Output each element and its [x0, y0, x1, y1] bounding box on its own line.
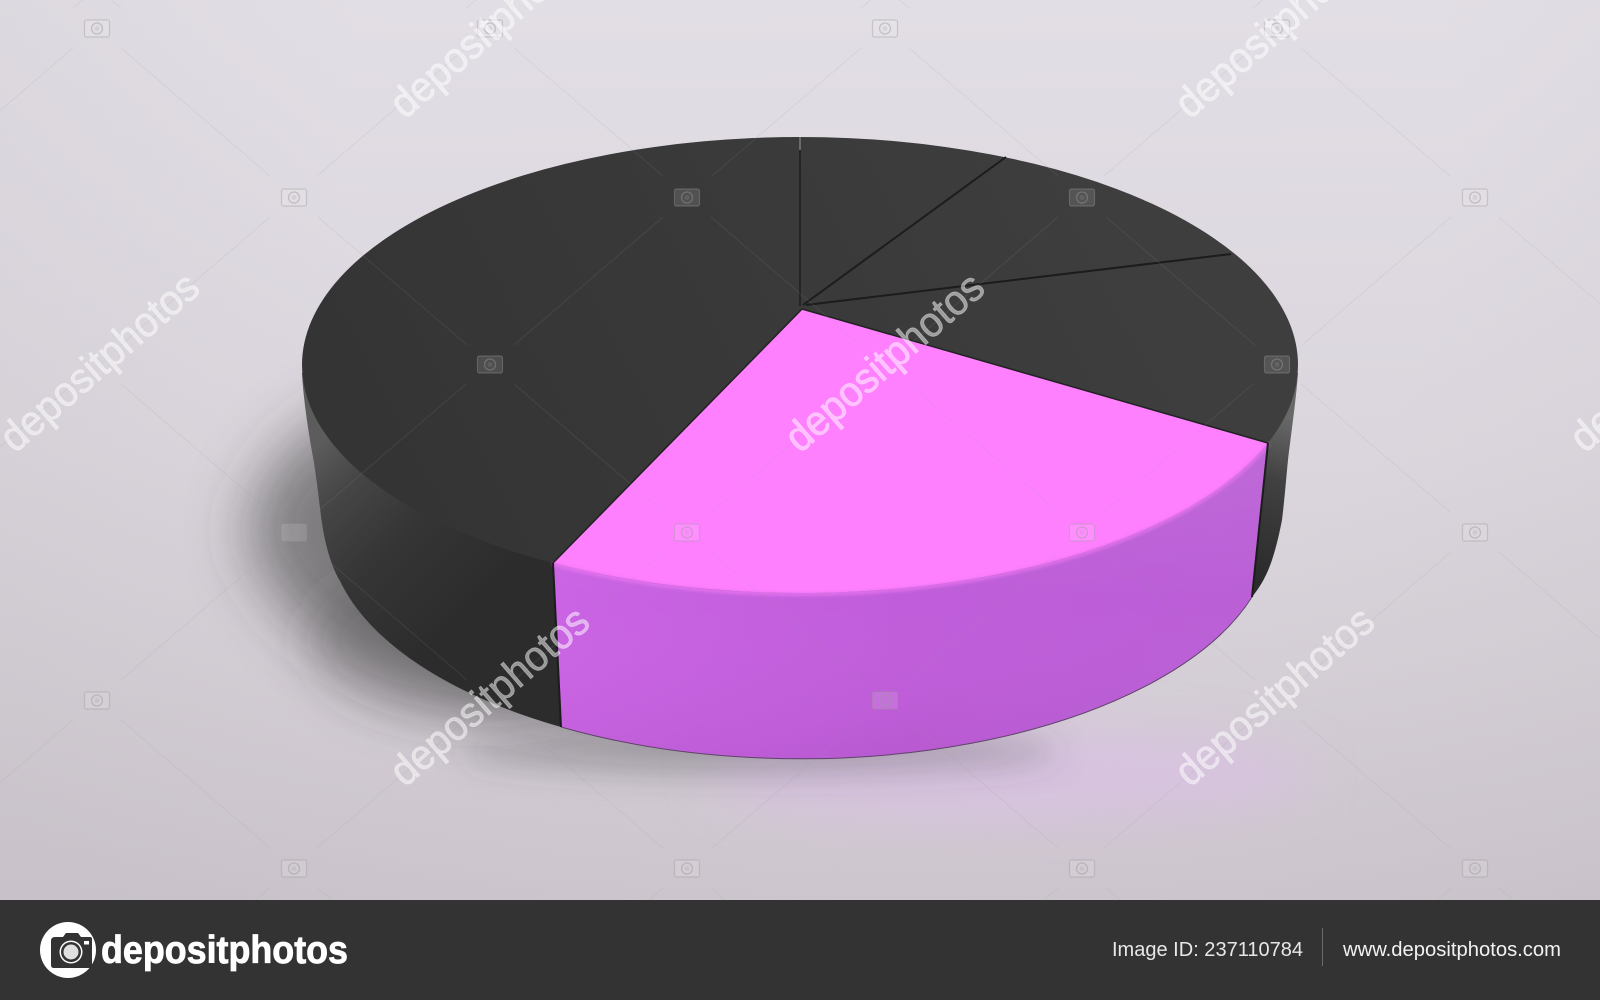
watermark camera icons: [84, 20, 1488, 877]
logo wordmark: depositphotos: [101, 929, 348, 972]
sector separator lines: [553, 137, 1268, 727]
black cylinder side, left: [302, 373, 800, 727]
separator: [1322, 928, 1323, 966]
icon: camera logo: [40, 922, 96, 978]
shadow under pie: [250, 335, 1310, 820]
watermark text: depositphotos: [1165, 597, 1383, 795]
watermark text: depositphotos: [380, 597, 598, 795]
footer bar: [0, 900, 1600, 1000]
sector bevel highlight: [553, 444, 1268, 594]
magenta sector top: [553, 309, 1268, 593]
watermark text: depositphotos: [775, 263, 993, 461]
magenta sector side: [553, 443, 1268, 759]
black cylinder side, right sliver: [1240, 373, 1298, 597]
black top surface: [302, 137, 1298, 593]
image id: Image ID: 237110784: [1112, 939, 1303, 961]
pie chart: [302, 137, 1298, 759]
website url: www.depositphotos.com: [1342, 939, 1561, 961]
watermark text: [0, 0, 1600, 795]
